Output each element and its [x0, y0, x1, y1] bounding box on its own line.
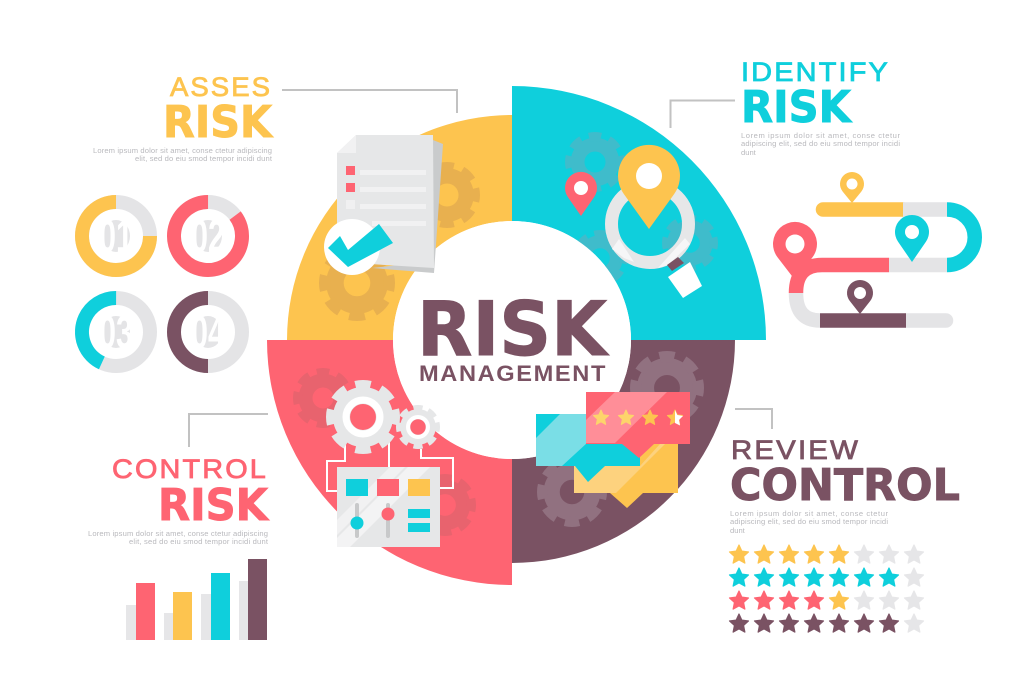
text block: identify risk description: adipiscing elit, sed do eiu smod tempor incidi — [741, 139, 900, 148]
donut chart: 01 — [82, 202, 150, 270]
icon: magnifier with location pins — [565, 145, 702, 298]
star row: coral four, yellow one of eight — [729, 591, 924, 609]
connector: control risk — [189, 414, 268, 447]
panel: plum quadrant, review control — [512, 340, 735, 563]
heading: control risk — [112, 454, 270, 531]
connector: asses risk — [282, 90, 457, 113]
heading: identify risk — [741, 57, 890, 133]
donut chart: 04: 04 — [191, 306, 225, 358]
icon: plum quadrant gear upper — [636, 357, 698, 419]
icon: gears and control panel — [327, 386, 453, 547]
connector: review control — [735, 409, 772, 429]
heading: review control — [730, 435, 960, 511]
star rating grid — [729, 545, 924, 632]
panel: coral quadrant, control risk — [267, 340, 512, 585]
donut chart: 02: 02 — [191, 210, 225, 262]
donut chart: 04 — [174, 298, 242, 366]
center title: risk management: MANAGEMENT — [419, 361, 607, 386]
donut chart: 02 — [160, 188, 256, 284]
icon: speech bubbles with star rating — [536, 392, 690, 508]
panel: teal quadrant, identify risk — [512, 86, 766, 340]
donut chart: 03: 03 — [99, 306, 133, 358]
icon: document checklist — [324, 135, 443, 275]
donut chart: 03 — [71, 287, 161, 377]
star row: plum seven of eight — [729, 614, 924, 632]
star row: teal seven of eight — [729, 568, 924, 586]
center white circle — [393, 221, 631, 459]
text block: review control description: adipiscing elit, sed do eiu smod tempor incidi — [730, 517, 888, 526]
icon: teal quadrant gear right — [666, 219, 714, 267]
connector: identify risk — [670, 100, 735, 128]
text block: identify risk description — [741, 131, 900, 157]
icon: yellow quadrant gear upper — [419, 167, 475, 223]
icon: teal quadrant gear bottom — [576, 234, 624, 282]
text block: identify risk description: Lorem ipsum dolor sit amet, conse ctetur — [741, 131, 900, 140]
text block: asses risk description — [93, 146, 273, 163]
text block: identify risk description: dunt — [741, 148, 757, 157]
heading: review control: REVIEW — [731, 435, 860, 465]
heading: identify risk: RISK — [741, 82, 853, 133]
panel: yellow quadrant, assess risk — [287, 115, 512, 340]
bar chart — [126, 559, 267, 640]
heading: asses risk: RISK — [163, 97, 274, 148]
icon: plum quadrant gear lower — [542, 462, 602, 522]
text block: control risk description — [88, 529, 269, 546]
star row: yellow five of eight — [729, 545, 924, 563]
heading: review control: CONTROL — [730, 460, 960, 511]
heading: control risk: RISK — [158, 480, 270, 531]
heading: asses risk — [163, 72, 274, 148]
icon: coral quadrant gear upper — [298, 372, 348, 424]
icon: teal quadrant gear top — [570, 136, 620, 188]
text block: review control description — [730, 509, 888, 535]
route map with pins — [773, 172, 975, 320]
donut chart: 01: 01 — [99, 210, 133, 262]
text block: control risk description: Lorem ipsum dolor sit amet, conse ctetur adipiscing — [88, 529, 268, 538]
heading: identify risk: IDENTIFY — [741, 57, 890, 87]
text block: asses risk description: Lorem ipsum dolor sit amet, conse ctetur adipiscing — [93, 146, 272, 155]
center title: risk management: RISK — [417, 285, 610, 373]
heading: asses risk: ASSES — [170, 72, 272, 102]
text block: control risk description: elit, sed do eiu smod tempor incidi dunt — [129, 537, 269, 546]
heading: control risk: CONTROL — [112, 454, 268, 484]
icon: coral quadrant gear lower — [419, 479, 471, 531]
text block: asses risk description: elit, sed do eiu smod tempor incidi dunt — [135, 154, 273, 163]
text block: review control description: dunt — [730, 526, 746, 535]
text block: review control description: Lorem ipsum dolor sit amet, conse ctetur — [730, 509, 888, 518]
icon: yellow quadrant gear lower — [325, 251, 389, 315]
